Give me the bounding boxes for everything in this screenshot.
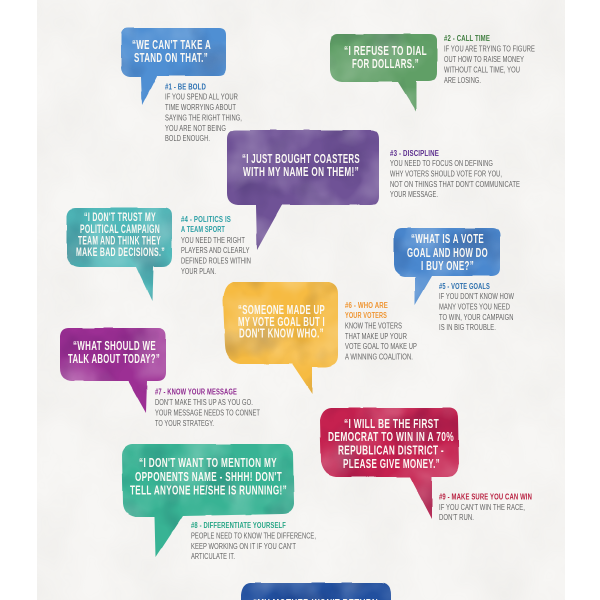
tip text 6: #6 - WHO ARE	[345, 300, 388, 310]
quote 9: PLEASE GIVE MONEY.”	[343, 457, 440, 471]
tip text 1: SAYING THE RIGHT THING,	[165, 112, 242, 122]
tip text 2: #2 - CALL TIME	[444, 33, 490, 43]
quote 5: GOAL AND HOW DO	[407, 246, 488, 260]
quote 4: “I DON'T TRUST MY	[84, 212, 156, 224]
tip text 2: OUT HOW TO RAISE MONEY	[444, 54, 524, 64]
tip text 6: YOUR VOTERS	[345, 310, 387, 320]
tip text 9: IF YOU CAN'T WIN THE RACE,	[439, 502, 525, 512]
quote 5: “WHAT IS A VOTE	[411, 232, 484, 246]
tip text 1: TIME WORRYING ABOUT	[165, 102, 236, 112]
tip 10: cropped bubble at the bottom	[241, 583, 391, 600]
tip text 8: #8 - DIFFERENTIATE YOURSELF	[191, 520, 286, 530]
quote 3: “I JUST BOUGHT COASTERS	[242, 152, 360, 166]
tip text 1: IF YOU SPEND ALL YOUR	[165, 92, 238, 102]
quote 3	[242, 152, 360, 179]
quote 4: POLITICAL CAMPAIGN	[80, 224, 160, 236]
tip text 5	[439, 281, 515, 332]
quote 9: DEMOCRAT TO WIN IN A 70%	[328, 430, 454, 444]
tip text 4: #4 - POLITICS IS	[181, 214, 231, 224]
tip text 5: MANY VOTES YOU NEED	[439, 302, 510, 312]
quote 2	[344, 44, 427, 71]
tip text 8	[191, 520, 316, 561]
quote 6: MY VOTE GOAL BUT I	[238, 315, 325, 329]
tip text 1: YOU ARE NOT BEING	[165, 123, 226, 133]
tip text 5: IS IN BIG TROUBLE.	[439, 322, 496, 332]
tip 4: politics is a team sport	[67, 208, 251, 301]
quote 1: “WE CAN'T TAKE A	[132, 38, 211, 52]
tip text 5: #5 - VOTE GOALS	[439, 281, 490, 291]
tip text 3: #3 - DISCIPLINE	[390, 148, 439, 158]
quote 1: STAND ON THAT.”	[134, 51, 208, 65]
tip text 4: A TEAM SPORT	[181, 224, 225, 234]
quote 6: “SOMEONE MADE UP	[238, 303, 325, 317]
quote 4: MAKE BAD DECISIONS.”	[76, 247, 165, 259]
tip text 7: TO YOUR STRATEGY.	[155, 418, 214, 428]
quote 9	[328, 417, 454, 471]
speech bubble: blue	[121, 28, 226, 105]
tip 2: call time	[330, 33, 535, 111]
quote 1	[132, 38, 211, 65]
tip text 3: YOUR MESSAGE.	[390, 189, 438, 199]
quote 7	[68, 339, 160, 366]
speech bubble: magenta	[60, 328, 166, 413]
tip 6: who are your voters	[223, 282, 417, 394]
tip text 8: PEOPLE NEED TO KNOW THE DIFFERENCE,	[191, 530, 316, 540]
quote 8	[130, 456, 287, 498]
quote 5	[407, 232, 488, 273]
tip text 2: IF YOU ARE TRYING TO FIGURE	[444, 44, 535, 54]
tip text 8: ARTICULATE IT.	[191, 551, 235, 561]
tip text 7: #7 - KNOW YOUR MESSAGE	[155, 386, 237, 396]
speech bubble: sea green	[122, 444, 294, 557]
tip text 7: YOUR MESSAGE NEEDS TO CONNET	[155, 408, 260, 418]
tip text 1: #1 - BE BOLD	[165, 82, 206, 92]
tip text 5: TO WIN, YOUR CAMPAIGN	[439, 312, 514, 322]
tip text 8: KEEP WORKING ON IT IF YOU CAN'T	[191, 541, 296, 551]
tip text 6: THAT MAKE UP YOUR	[345, 331, 407, 341]
tip text 2	[444, 33, 535, 85]
quote 2: FOR DOLLARS.”	[352, 57, 419, 71]
quote 8: TELL ANYONE HE/SHE IS RUNNING!”	[130, 484, 287, 498]
quote 8: OPPONENTS NAME - SHHH! DON'T	[135, 470, 282, 484]
tip text 3: NOT ON THINGS THAT DON'T COMMUNICATE	[390, 179, 520, 189]
speech bubble: green	[330, 34, 437, 111]
tip text 7: DON'T MAKE THIS UP AS YOU GO.	[155, 397, 253, 407]
speech bubble: teal	[67, 208, 172, 301]
tip text 9: DON'T RUN.	[439, 512, 474, 522]
tip text 6	[345, 300, 417, 362]
tip text 4: YOU NEED THE RIGHT	[181, 235, 245, 245]
quote 2: “I REFUSE TO DIAL	[344, 44, 427, 58]
tip 3: discipline	[227, 130, 520, 250]
tip text 1: BOLD ENOUGH.	[165, 133, 210, 143]
tip text 7	[155, 386, 260, 428]
tip text 3: YOU NEED TO FOCUS ON DEFINING	[390, 158, 493, 168]
tip text 9: #9 - MAKE SURE YOU CAN WIN	[439, 492, 532, 502]
tip text 9	[439, 492, 532, 522]
quote 6	[238, 303, 325, 340]
tip text 2: ARE LOSING.	[444, 75, 481, 85]
tip text 2: WITHOUT CALL TIME, YOU	[444, 64, 520, 74]
quote 8: “I DON'T WANT TO MENTION MY	[139, 456, 277, 470]
tip 7: know your message	[60, 328, 260, 428]
quote 4	[76, 212, 165, 259]
speech bubble: purple	[227, 130, 379, 250]
quote 5: I BUY ONE?”	[421, 259, 474, 273]
tip text 6: A WINNING COALITION.	[345, 352, 413, 362]
tip text 3	[390, 148, 520, 199]
tip text 1	[165, 82, 242, 143]
tip text 3: WHY VOTERS SHOULD VOTE FOR YOU,	[390, 168, 502, 178]
tip text 4: PLAYERS AND CLEARLY	[181, 245, 250, 255]
speech bubble: blue	[394, 228, 500, 305]
tip text 6: KNOW THE VOTERS	[345, 320, 402, 330]
speech bubble: crimson	[320, 408, 459, 519]
tip text 5: IF YOU DON'T KNOW HOW	[439, 291, 515, 301]
speech bubble: navy	[241, 583, 391, 600]
quote 4: TEAM AND THINK THEY	[78, 236, 161, 248]
tip text 4: YOUR PLAN.	[181, 266, 216, 276]
tip 1: be bold	[121, 28, 242, 143]
tip 8: differentiate yourself	[122, 444, 316, 561]
tip text 4: DEFINED ROLES WITHIN	[181, 256, 251, 266]
tip 5: vote goals	[394, 228, 515, 332]
tip text 4	[181, 214, 251, 276]
quote 9: “I WILL BE THE FIRST	[344, 417, 439, 431]
quote 3: WITH MY NAME ON THEM!”	[243, 165, 359, 179]
speech bubble: yellow	[223, 282, 338, 394]
quote 9: REPUBLICAN DISTRICT -	[338, 444, 444, 458]
tip text 6: VOTE GOAL TO MAKE UP	[345, 341, 417, 351]
quote 7: “WHAT SHOULD WE	[73, 339, 156, 353]
quote 6: DON'T KNOW WHO.”	[239, 326, 324, 340]
tip 9: make sure you can win	[320, 408, 532, 522]
quote 7: TALK ABOUT TODAY?”	[68, 352, 160, 366]
